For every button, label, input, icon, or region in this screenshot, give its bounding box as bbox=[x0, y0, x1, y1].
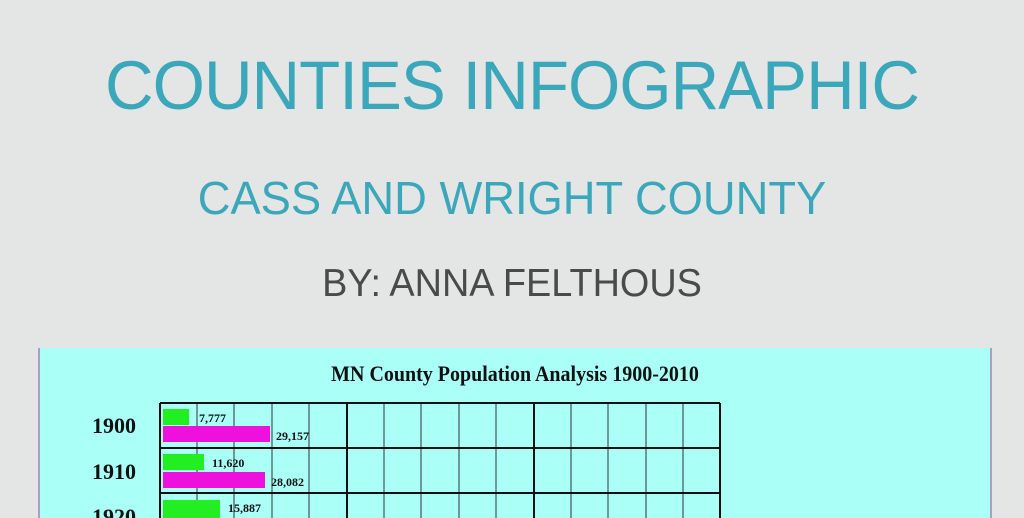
bar chart: 15,887 bbox=[228, 501, 261, 515]
bar chart: 1910 bbox=[92, 459, 136, 484]
author: BY: ANNA FELTHOUS bbox=[322, 262, 702, 305]
bar chart: 28,082 bbox=[271, 475, 304, 489]
panel: chart bbox=[38, 348, 992, 518]
bar chart: 29,157 bbox=[276, 429, 309, 443]
chart title: MN County Population Analysis 1900-2010 bbox=[331, 361, 699, 386]
subtitle: CASS AND WRIGHT COUNTY bbox=[198, 172, 826, 224]
bar chart: 11,620 bbox=[212, 456, 244, 470]
bar chart: 7,777 bbox=[199, 411, 226, 425]
bar chart bbox=[92, 403, 720, 518]
title: COUNTIES INFOGRAPHIC bbox=[105, 47, 919, 124]
bar chart: 1900 bbox=[92, 413, 136, 438]
